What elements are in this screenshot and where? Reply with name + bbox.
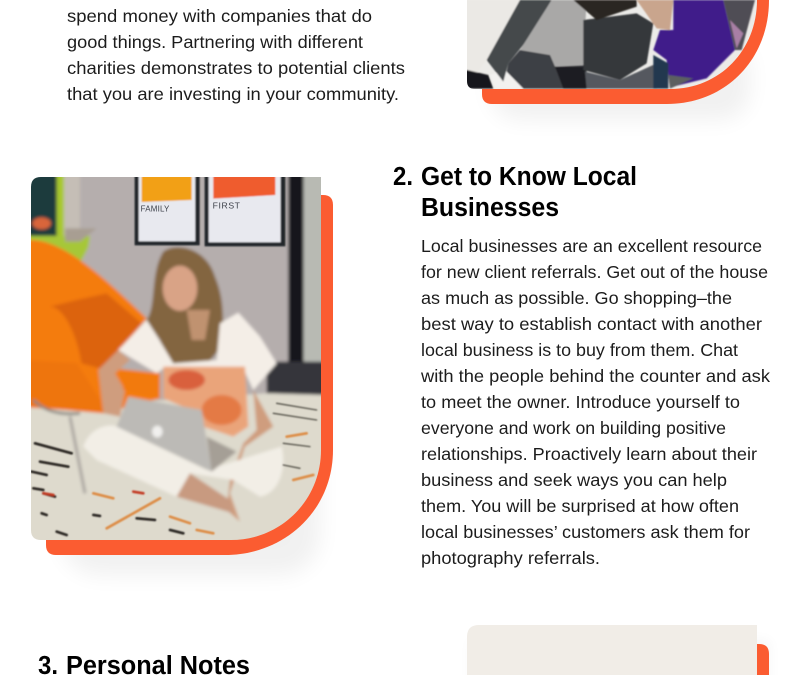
- text block: step 2 body: [420, 236, 770, 568]
- poster captions: [141, 202, 240, 212]
- text block: step 2 body: best way to establish contact with another: [421, 314, 762, 334]
- panel: woman with laptop photo with orange backing: [20, 170, 333, 575]
- panel: group photo with orange backing: [460, 0, 769, 120]
- heading: step 2: Businesses: [421, 194, 559, 222]
- poster captions: FIRST: [213, 201, 241, 211]
- poster captions: FAMILY: [141, 204, 170, 213]
- intro text block: step 1 ending: [67, 6, 405, 104]
- text block: step 2 body: everyone and work on building positive: [421, 418, 726, 438]
- rug pattern marks: [32, 403, 317, 535]
- panel: step 3 photo top with orange backing: [467, 625, 770, 675]
- heading: step 2: [393, 163, 637, 222]
- text block: step 2 body: to meet the owner. Introduce yourself to: [421, 392, 740, 412]
- posters: [135, 170, 285, 246]
- intro text block: step 1 ending: spend money with companies that do: [67, 6, 372, 26]
- text block: step 2 body: photography referrals.: [421, 548, 600, 568]
- photo: pale wall: [467, 625, 757, 675]
- intro text block: step 1 ending: charities demonstrates to potential clients: [67, 58, 405, 78]
- heading: step 2: Get to Know Local: [421, 163, 637, 191]
- text block: step 2 body: local businesses’ customers ask them for: [421, 522, 750, 542]
- text block: step 2 body: them. You will be surprised at how often: [421, 496, 739, 516]
- intro text block: step 1 ending: good things. Partnering with different: [67, 32, 363, 52]
- text block: step 2 body: relationships. Proactively learn about their: [421, 444, 757, 464]
- heading: step 2: 2.: [393, 163, 413, 191]
- text block: step 2 body: business and seek ways you can help: [421, 470, 727, 490]
- intro text block: step 1 ending: that you are investing in your community.: [67, 84, 399, 104]
- orange backing shape bottom: [750, 644, 769, 675]
- text block: step 2 body: for new client referrals. Get out of the house: [421, 262, 768, 282]
- text block: step 2 body: as much as possible. Go shopping–the: [421, 288, 732, 308]
- orange backing shape top: [482, 0, 769, 104]
- text block: step 2 body: with the people behind the counter and ask: [420, 366, 770, 386]
- photo: group of people: [460, 0, 757, 89]
- hair: [147, 247, 223, 368]
- orange backing shape: [46, 195, 333, 555]
- text block: step 2 body: local business is to buy from them. Chat: [421, 340, 738, 360]
- photo: woman sitting with laptop: [20, 170, 327, 547]
- text block: step 2 body: Local businesses are an excellent resource: [421, 236, 762, 256]
